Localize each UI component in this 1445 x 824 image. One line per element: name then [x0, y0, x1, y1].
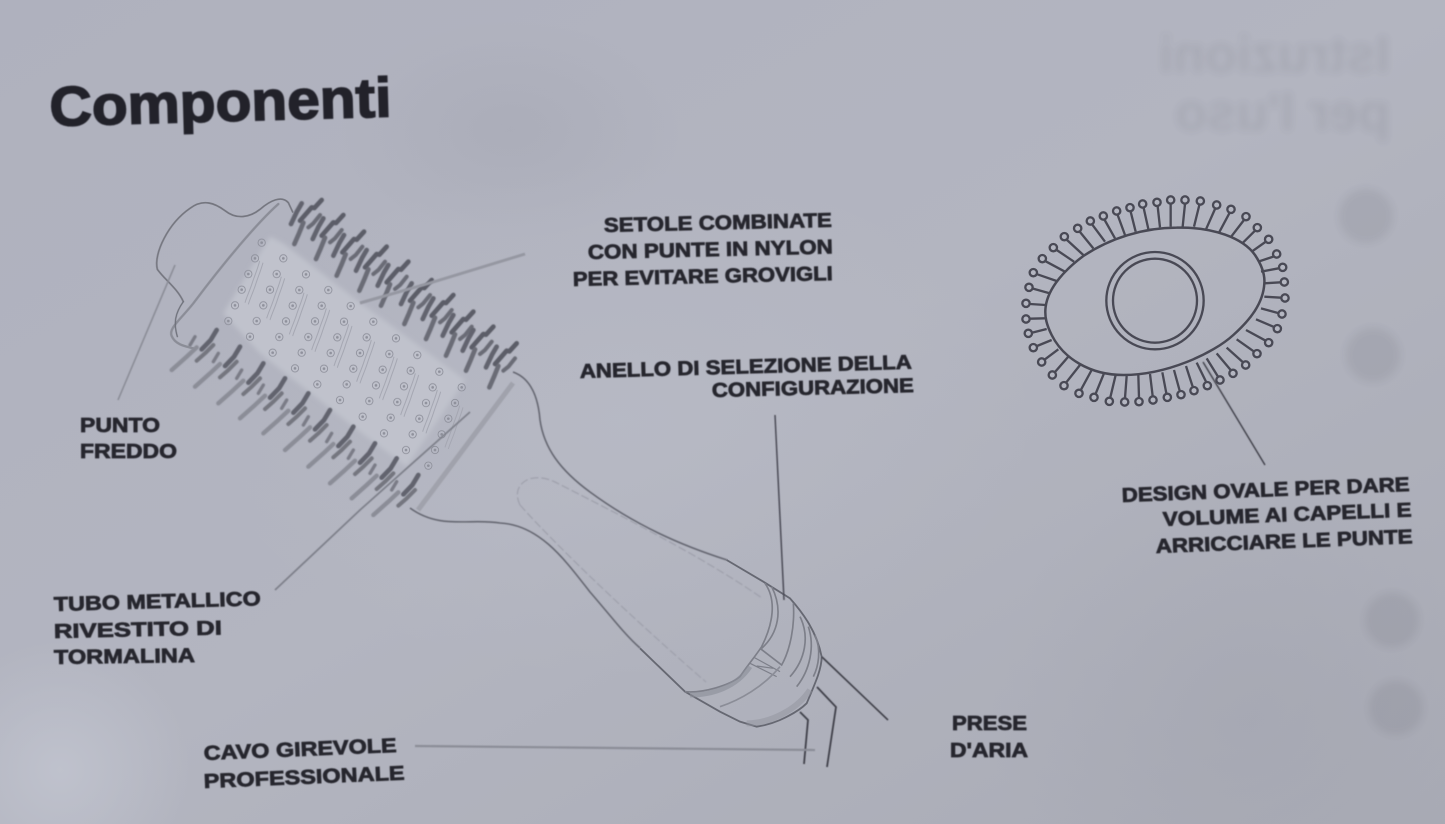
label: oval design: VOLUME AI CAPELLI E: [1162, 499, 1412, 531]
barrel perforations: [225, 239, 465, 469]
handle upper edge near the barrel: [513, 372, 727, 560]
collar band: [418, 383, 513, 510]
label: configuration ring: ANELLO DI SELEZIONE DELLA: [580, 352, 912, 383]
leader lines: [118, 254, 1265, 750]
label: air vents: PRESE: [952, 713, 1027, 735]
end rings: [640, 560, 822, 727]
barrel surface: [223, 237, 465, 467]
pins around the oval: [1022, 196, 1289, 406]
brush barrel and bristles: [157, 199, 517, 515]
label: swivel cord: CAVO GIREVOLE: [203, 735, 397, 765]
power cable: [800, 687, 836, 767]
cold tip outline: [157, 199, 293, 348]
oval outline: [1045, 228, 1264, 375]
icon: oval barrel cross-section: [1022, 196, 1289, 406]
title: Componenti: [49, 65, 392, 138]
show-through from the reverse page: [1159, 26, 1423, 735]
label: configuration ring: [580, 352, 914, 402]
label: configuration ring: CONFIGURAZIONE: [712, 375, 914, 402]
label: bristles: [573, 210, 833, 291]
label: bristles: CON PUNTE IN NYLON: [588, 236, 833, 264]
label: tourmaline tube: TORMALINA: [54, 645, 195, 669]
bristles: lower rows: [172, 330, 418, 515]
show-through from the reverse page: per l'uso: [1175, 84, 1390, 142]
label: tourmaline tube: [54, 588, 261, 669]
label: bristles: SETOLE COMBINATE: [604, 210, 832, 237]
label: cool tip: PUNTO: [80, 415, 160, 437]
label: cool tip: [80, 415, 177, 463]
show-through from the reverse page: Istruzioni: [1159, 26, 1390, 84]
label: cool tip: FREDDO: [80, 441, 177, 463]
label: tourmaline tube: TUBO METALLICO: [54, 588, 261, 616]
handle inner window: [517, 478, 762, 682]
bristles: upper rows: [291, 200, 517, 387]
label: swivel cord: [203, 735, 405, 793]
label: oval design: ARRICCIARE LE PUNTE: [1155, 526, 1413, 558]
label: oval design: DESIGN OVALE PER DARE: [1121, 474, 1410, 507]
handle lower edge: [410, 508, 640, 648]
label: air vents: D'ARIA: [950, 740, 1028, 762]
illustration: hair brush: [157, 199, 836, 767]
label: tourmaline tube: RIVESTITO DI: [54, 617, 222, 643]
label: bristles: PER EVITARE GROVIGLI: [573, 263, 833, 291]
label: swivel cord: PROFESSIONALE: [203, 763, 405, 793]
label: air vents: [950, 713, 1028, 762]
label: oval design: [1121, 474, 1413, 558]
centre ring: [1106, 252, 1204, 349]
